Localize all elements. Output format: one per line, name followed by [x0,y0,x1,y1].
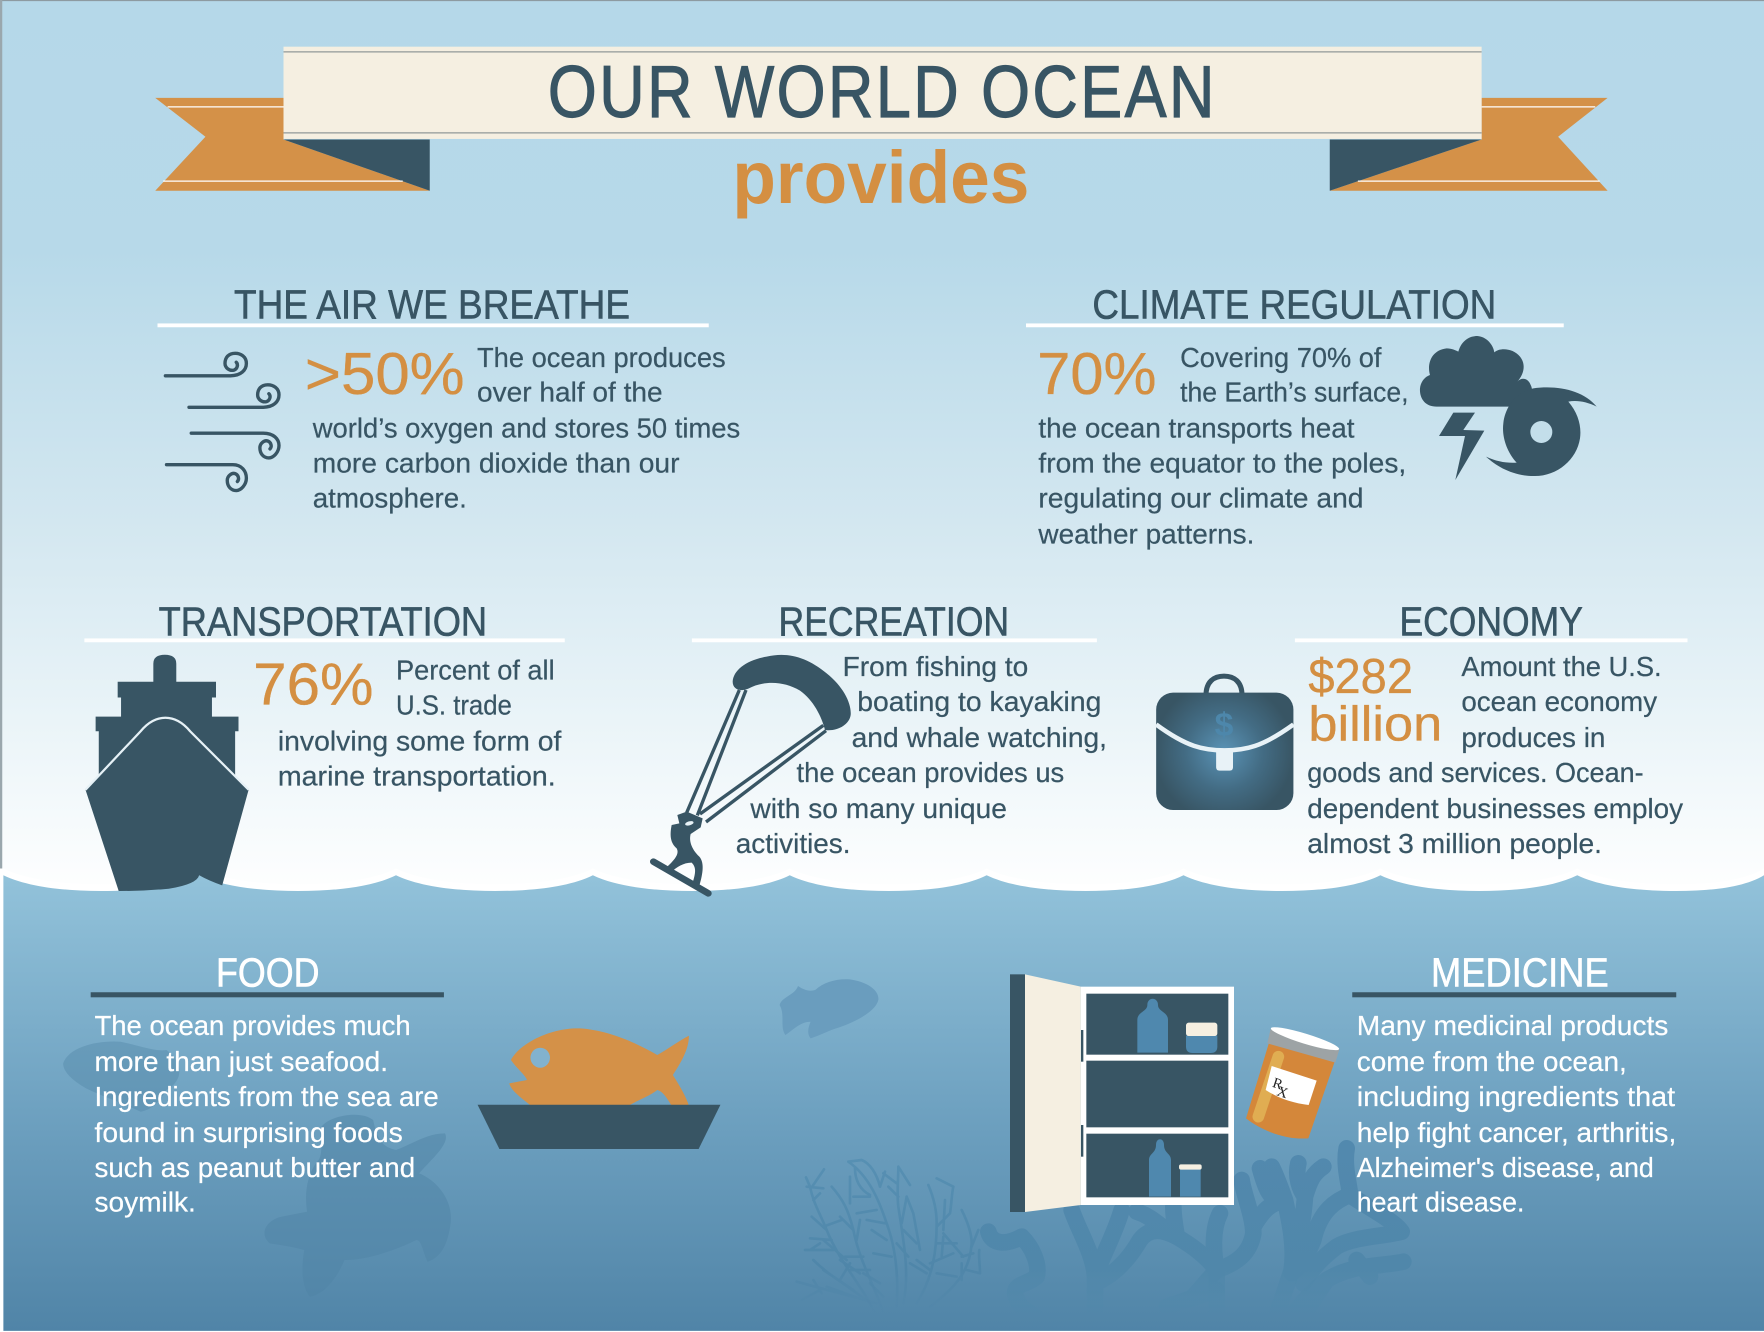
text block: over half of the [477,377,663,408]
text block: activities. [736,828,850,859]
statistic: billion [1308,696,1442,751]
text block [312,342,740,513]
icon: fish on a plate [478,1028,720,1149]
text block: Covering 70% of [1180,342,1382,373]
background fish silhouette [780,979,878,1038]
panel: climate regulation [1026,281,1597,549]
text block: almost 3 million people. [1307,828,1602,859]
panel: medicine [1010,950,1676,1218]
icon: kitesurfer [653,655,851,893]
panel: transportation [84,599,565,891]
text block [1037,342,1408,549]
heading: MEDICINE [1431,950,1609,996]
heading: ECONOMY [1400,599,1583,645]
text block: come from the ocean, [1357,1046,1627,1077]
text block: more than just seafood. [94,1046,388,1077]
text block: marine transportation. [278,760,556,791]
panel: the air we breathe [158,281,740,513]
text block: such as peanut butter and [94,1152,415,1183]
background coral right [988,1148,1403,1320]
subtitle: provides [732,136,1029,219]
text block: boating to kayaking [857,686,1101,717]
text block [1357,1010,1676,1218]
text block: Ingredients from the sea are [94,1081,439,1112]
left ribbon tail [155,98,430,191]
text block: involving some form of [278,725,562,756]
text block: soymilk. [94,1187,196,1218]
text block [1307,651,1683,859]
text block: regulating our climate and [1038,482,1364,513]
text block: weather patterns. [1037,518,1254,549]
icon: medicine cabinet [1010,974,1234,1212]
white wave crests [0,868,1764,900]
panel: recreation [653,599,1107,893]
statistic: 70% [1037,340,1156,407]
banner strip [284,47,1482,139]
text block: including ingredients that [1357,1081,1675,1112]
text block: The ocean produces [477,342,726,373]
text block: found in surprising foods [94,1117,403,1148]
icon: briefcase: $ [1215,706,1234,744]
text block: more carbon dioxide than our [313,447,680,478]
icon: storm cloud, lightning and hurricane [1420,336,1597,480]
text block: Amount the U.S. [1461,651,1662,682]
statistic: $282 [1308,649,1413,704]
text block: ocean economy [1461,686,1657,717]
text block: From fishing to [843,651,1028,682]
text block: produces in [1461,722,1605,753]
text block: Percent of all [396,654,555,685]
text block: Many medicinal products [1357,1010,1668,1041]
text block [94,1010,439,1218]
title text: OUR WORLD OCEAN [548,52,1214,133]
right ribbon tail [1330,98,1608,191]
panel: food [91,950,720,1218]
text block: U.S. trade [396,689,512,720]
heading: FOOD [216,950,320,996]
statistic: >50% [305,340,465,407]
background turtle silhouette [265,1115,451,1297]
text block: help fight cancer, arthritis, [1357,1117,1676,1148]
text block: the ocean transports heat [1038,413,1355,444]
heading: TRANSPORTATION [159,599,487,645]
text block [278,654,562,791]
statistic: 76% [253,650,374,717]
text block: and whale watching, [852,722,1107,753]
icon: pill bottle: R [1270,1075,1285,1094]
background coral left [797,1160,980,1317]
heading: THE AIR WE BREATHE [234,281,630,327]
background fish silhouette left [63,1041,179,1112]
text block: world’s oxygen and stores 50 times [312,413,740,444]
text block: dependent businesses employ [1307,793,1683,824]
icon: pill bottle [1246,1023,1341,1139]
panel: economy [1156,599,1688,859]
icon: briefcase [1156,676,1293,810]
text block: goods and services. Ocean- [1307,757,1644,788]
heading: RECREATION [778,599,1009,645]
icon: pill bottle: X [1275,1084,1290,1102]
icon: wind [165,353,279,490]
icon: ship [86,655,249,891]
ocean water [3,875,1764,1331]
heading: CLIMATE REGULATION [1092,281,1496,327]
text block: with so many unique [749,793,1007,824]
text block: Alzheimer's disease, and [1357,1152,1654,1183]
text block: from the equator to the poles, [1038,447,1406,478]
text block: The ocean provides much [94,1010,411,1041]
text block: the Earth’s surface, [1180,377,1408,408]
text block: the ocean provides us [796,757,1064,788]
text block: atmosphere. [313,482,467,513]
text block: heart disease. [1357,1187,1524,1218]
statistic [1308,649,1442,751]
text block [736,651,1107,859]
title banner [155,47,1608,191]
